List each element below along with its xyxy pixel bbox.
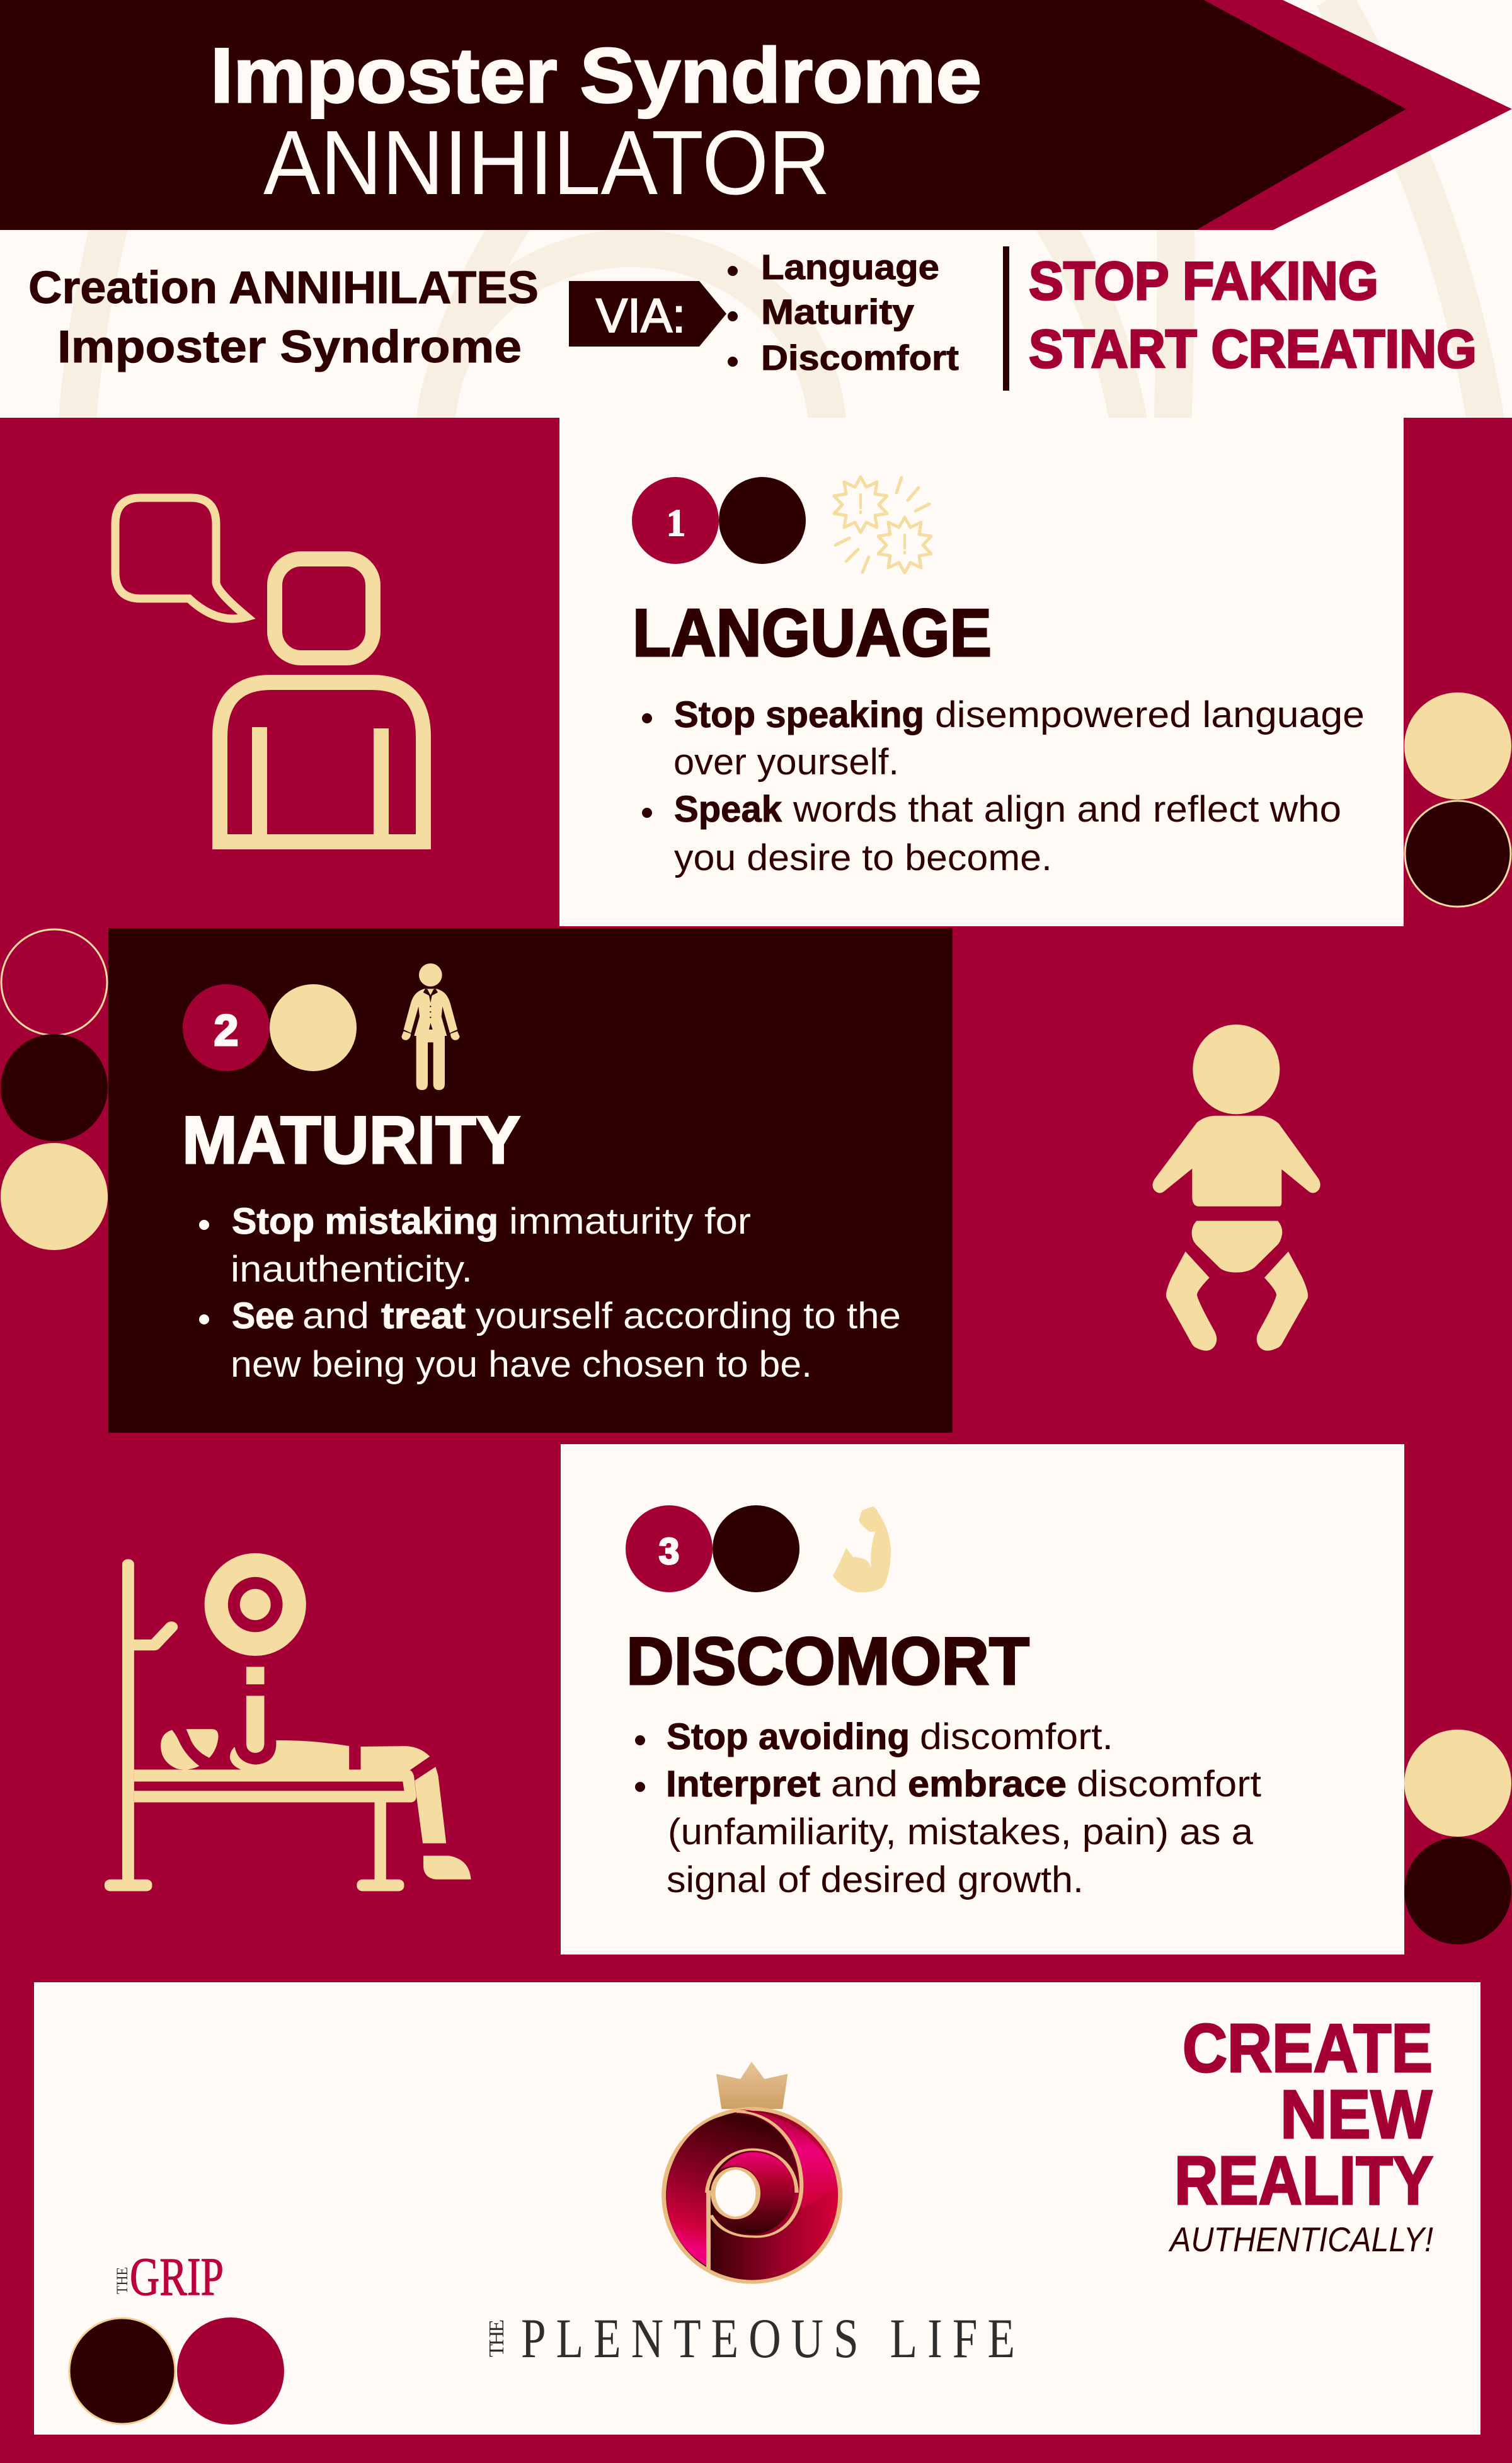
number badge 1: 1 — [667, 502, 685, 544]
heading: language: LANGUAGE — [633, 595, 992, 670]
icon: sparks — [834, 477, 931, 573]
number badge 1 — [632, 477, 806, 564]
decorative circles right 1 — [1404, 692, 1511, 907]
text block: discomfort bullets: signal of desired growth. — [667, 1859, 1084, 1900]
number badge 3: 3 — [659, 1531, 679, 1572]
slogan: stop faking start creating: START CREATING — [1029, 319, 1477, 379]
panel: discomfort — [561, 1444, 1404, 1955]
number badge 3 — [626, 1505, 799, 1592]
text block: discomfort bullets: (unfamiliarity, mistakes, pain) as a — [668, 1811, 1254, 1852]
heading: maturity: MATURITY — [182, 1102, 520, 1178]
number badge 2 — [183, 984, 357, 1071]
text block: language bullets: disempowered language — [935, 694, 1365, 735]
call to action: create new reality: AUTHENTICALLY! — [1168, 2220, 1433, 2259]
logo: the grip: THE — [114, 2267, 131, 2294]
call to action: create new reality — [1168, 2010, 1433, 2259]
slogan: stop faking start creating: STOP FAKING — [1029, 251, 1378, 311]
panel: maturity — [108, 928, 953, 1433]
text block: maturity bullets: immaturity for — [509, 1201, 751, 1242]
icon: person speaking — [115, 498, 423, 842]
logo: crowned P emblem — [662, 2062, 842, 2284]
number badge 2: 2 — [214, 1006, 238, 1055]
list: language maturity discomfort: Discomfort — [761, 338, 959, 377]
list: language maturity discomfort: Maturity — [761, 292, 914, 331]
text block: maturity bullets: Stop mistaking — [232, 1201, 498, 1242]
text block: language bullets: Speak — [674, 789, 782, 830]
text block: discomfort bullets: discomfort — [1077, 1764, 1261, 1805]
text block: maturity bullets: See — [232, 1295, 294, 1336]
via arrow label — [569, 281, 726, 347]
text block: language bullets: you desire to become. — [674, 837, 1052, 878]
via arrow label: VIA: — [596, 289, 685, 343]
text block: discomfort bullets — [635, 1716, 1261, 1900]
icon: adult in suit — [401, 963, 460, 1090]
footer circles — [69, 2317, 284, 2425]
panel: intro band — [0, 0, 1512, 428]
text block: maturity bullets: new being you have chosen to be. — [231, 1344, 812, 1385]
text block: language bullets: Stop speaking — [674, 694, 924, 735]
text block: discomfort bullets: discomfort. — [920, 1716, 1113, 1757]
panel: language — [559, 418, 1404, 926]
wordmark: the plenteous life: THE — [485, 2319, 508, 2357]
decorative circles left — [1, 929, 108, 1250]
header banner arrow — [0, 0, 1512, 230]
text block: maturity bullets: and — [302, 1295, 369, 1336]
icon: baby — [1153, 1025, 1320, 1351]
title: ANNIHILATOR — [263, 112, 830, 214]
divider line — [1003, 246, 1009, 391]
logo: the grip: GRIP — [130, 2246, 224, 2307]
list: language maturity discomfort: Language — [761, 247, 939, 287]
heading: discomort: DISCOMORT — [626, 1623, 1029, 1699]
slogan: stop faking start creating — [1029, 251, 1477, 379]
text block: discomfort bullets: Stop avoiding — [667, 1716, 910, 1757]
text block: maturity bullets: treat — [381, 1295, 466, 1336]
wordmark: the plenteous life: PLENTEOUS LIFE — [521, 2308, 1015, 2370]
logo: the grip — [114, 2246, 224, 2307]
subtitle: creation annihilates imposter syndrome: Creation ANNIHILATES — [28, 263, 539, 313]
call to action: create new reality: CREATE — [1183, 2010, 1433, 2087]
list: language maturity discomfort — [728, 247, 959, 377]
text block: language bullets: over yourself. — [673, 742, 899, 783]
call to action: create new reality: NEW — [1280, 2076, 1432, 2153]
decorative circles right 2 — [1404, 1730, 1511, 1944]
text block: discomfort bullets: Interpret — [666, 1764, 820, 1805]
text block: discomfort bullets: embrace — [908, 1764, 1067, 1805]
subtitle: creation annihilates imposter syndrome: Imposter Syndrome — [57, 322, 522, 372]
text block: maturity bullets — [199, 1201, 901, 1385]
text block: maturity bullets: inauthenticity. — [231, 1249, 472, 1290]
title: Imposter Syndrome — [210, 33, 982, 119]
text block: maturity bullets: yourself according to the — [476, 1295, 901, 1336]
panel: footer — [34, 1982, 1480, 2435]
text block: language bullets: words that align and reflect who — [793, 789, 1341, 830]
subtitle: creation annihilates imposter syndrome — [28, 263, 539, 372]
icon: flexed arm — [833, 1507, 891, 1592]
icon: bench press — [105, 1553, 471, 1891]
title — [210, 33, 982, 214]
text block: language bullets — [642, 694, 1365, 878]
text block: discomfort bullets: and — [831, 1764, 898, 1805]
call to action: create new reality: REALITY — [1174, 2142, 1433, 2219]
